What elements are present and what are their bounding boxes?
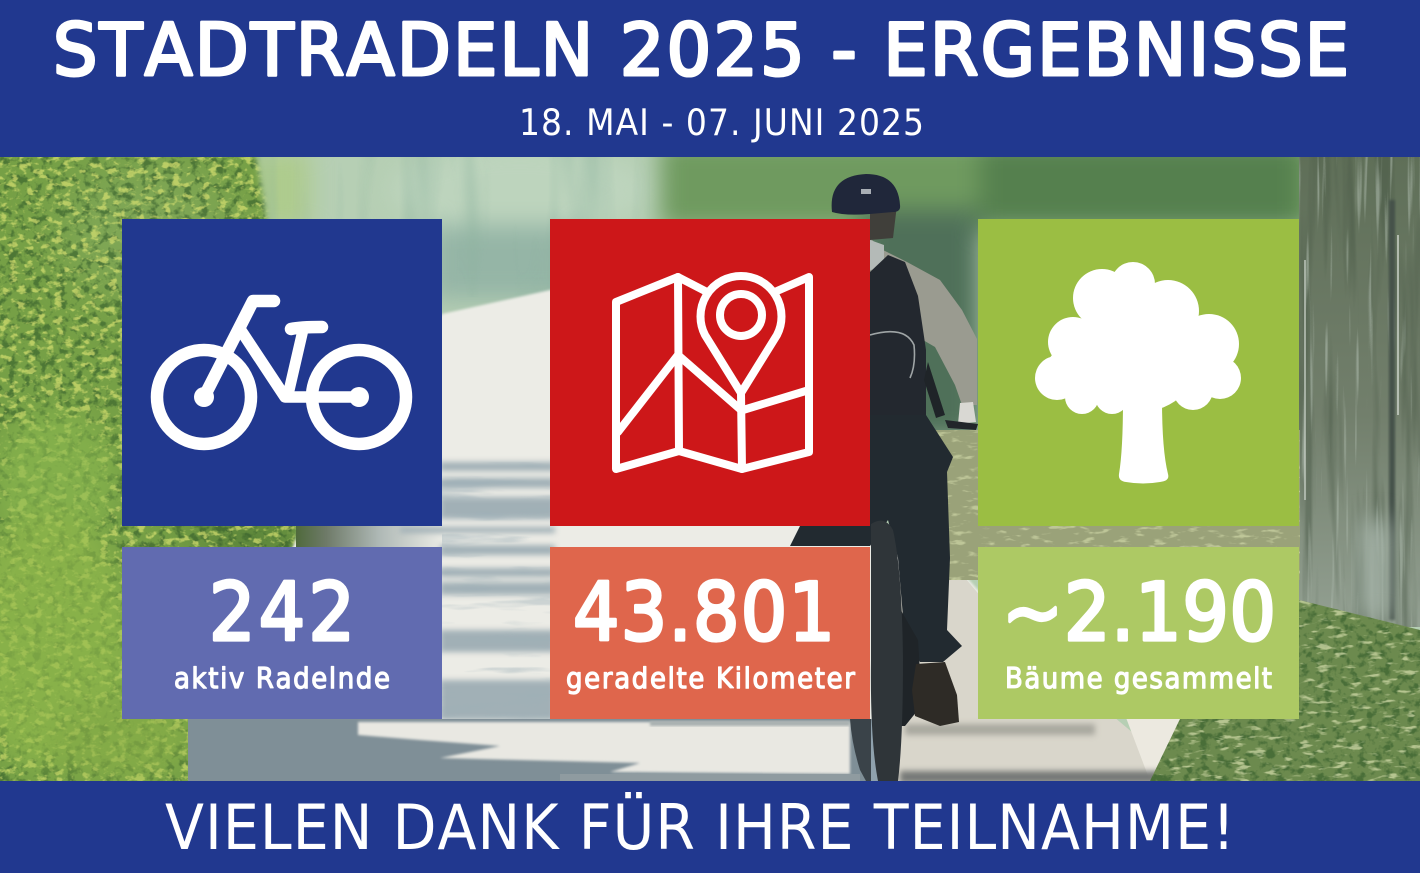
wheel: [850, 521, 903, 781]
cap: [832, 174, 900, 215]
shirt and right arm: [870, 238, 977, 405]
frame and pedal: [902, 612, 920, 726]
icon: tree: [1035, 262, 1241, 484]
number: 43.801: [573, 567, 835, 660]
dark trousers: [790, 415, 962, 662]
collar: [870, 240, 884, 270]
subtitle: dates: 18. MAI - 07. JUNI 2025: [519, 103, 924, 144]
background photo: cyclist on a tree-lined path: [0, 140, 1420, 790]
hazy distance and treetops: [254, 157, 1299, 430]
icon tile: bicycle: [122, 219, 442, 526]
tree trunks: [1299, 157, 1420, 627]
cyclist: [790, 174, 978, 781]
roadside plants lower right: [1150, 590, 1420, 785]
shoe: [912, 662, 959, 726]
stat tile: active cyclists: [122, 547, 442, 719]
stat tile: kilometres ridden: [550, 547, 870, 719]
road texture: [442, 462, 550, 674]
road shadow next to the hedge: [296, 526, 446, 547]
thank-you message: VIELEN DANK FÜR IHRE TEILNAHME!: [165, 791, 1235, 865]
icon: map with location pin: [616, 276, 809, 469]
icon tile: tree: [978, 219, 1299, 526]
panel: cyclists: [122, 219, 442, 719]
icon tile: map: [550, 219, 870, 526]
title: STADTRADELN 2025 - ERGEBNISSE: [53, 8, 1349, 92]
left foliage: [0, 157, 320, 781]
backpack zip line: [870, 332, 914, 378]
asphalt below the tiles, left side: [188, 719, 878, 781]
footer band: [0, 781, 1420, 873]
road surface: [291, 288, 978, 719]
caption: Bäume gesammelt: [1005, 663, 1272, 695]
out-of-focus foreground leaves: [0, 410, 190, 780]
road tree shadows: [400, 462, 555, 720]
header band: [0, 0, 1420, 157]
caption: aktiv Radelnde: [174, 663, 390, 695]
panel: kilometres: [550, 219, 870, 719]
neck: [870, 212, 896, 240]
stat tile: trees collected: [978, 547, 1299, 719]
hand and handlebar: [958, 402, 976, 424]
road right of cyclist: [898, 580, 1146, 781]
backpack strap: [924, 362, 945, 418]
number: ~2.190: [1002, 567, 1276, 660]
backpack: [870, 255, 926, 415]
icon: bicycle: [157, 301, 406, 444]
number: 242: [209, 567, 355, 660]
panel: trees: [978, 219, 1299, 719]
roadside grass behind the tiles: [930, 430, 1300, 580]
caption: geradelte Kilometer: [566, 663, 856, 695]
